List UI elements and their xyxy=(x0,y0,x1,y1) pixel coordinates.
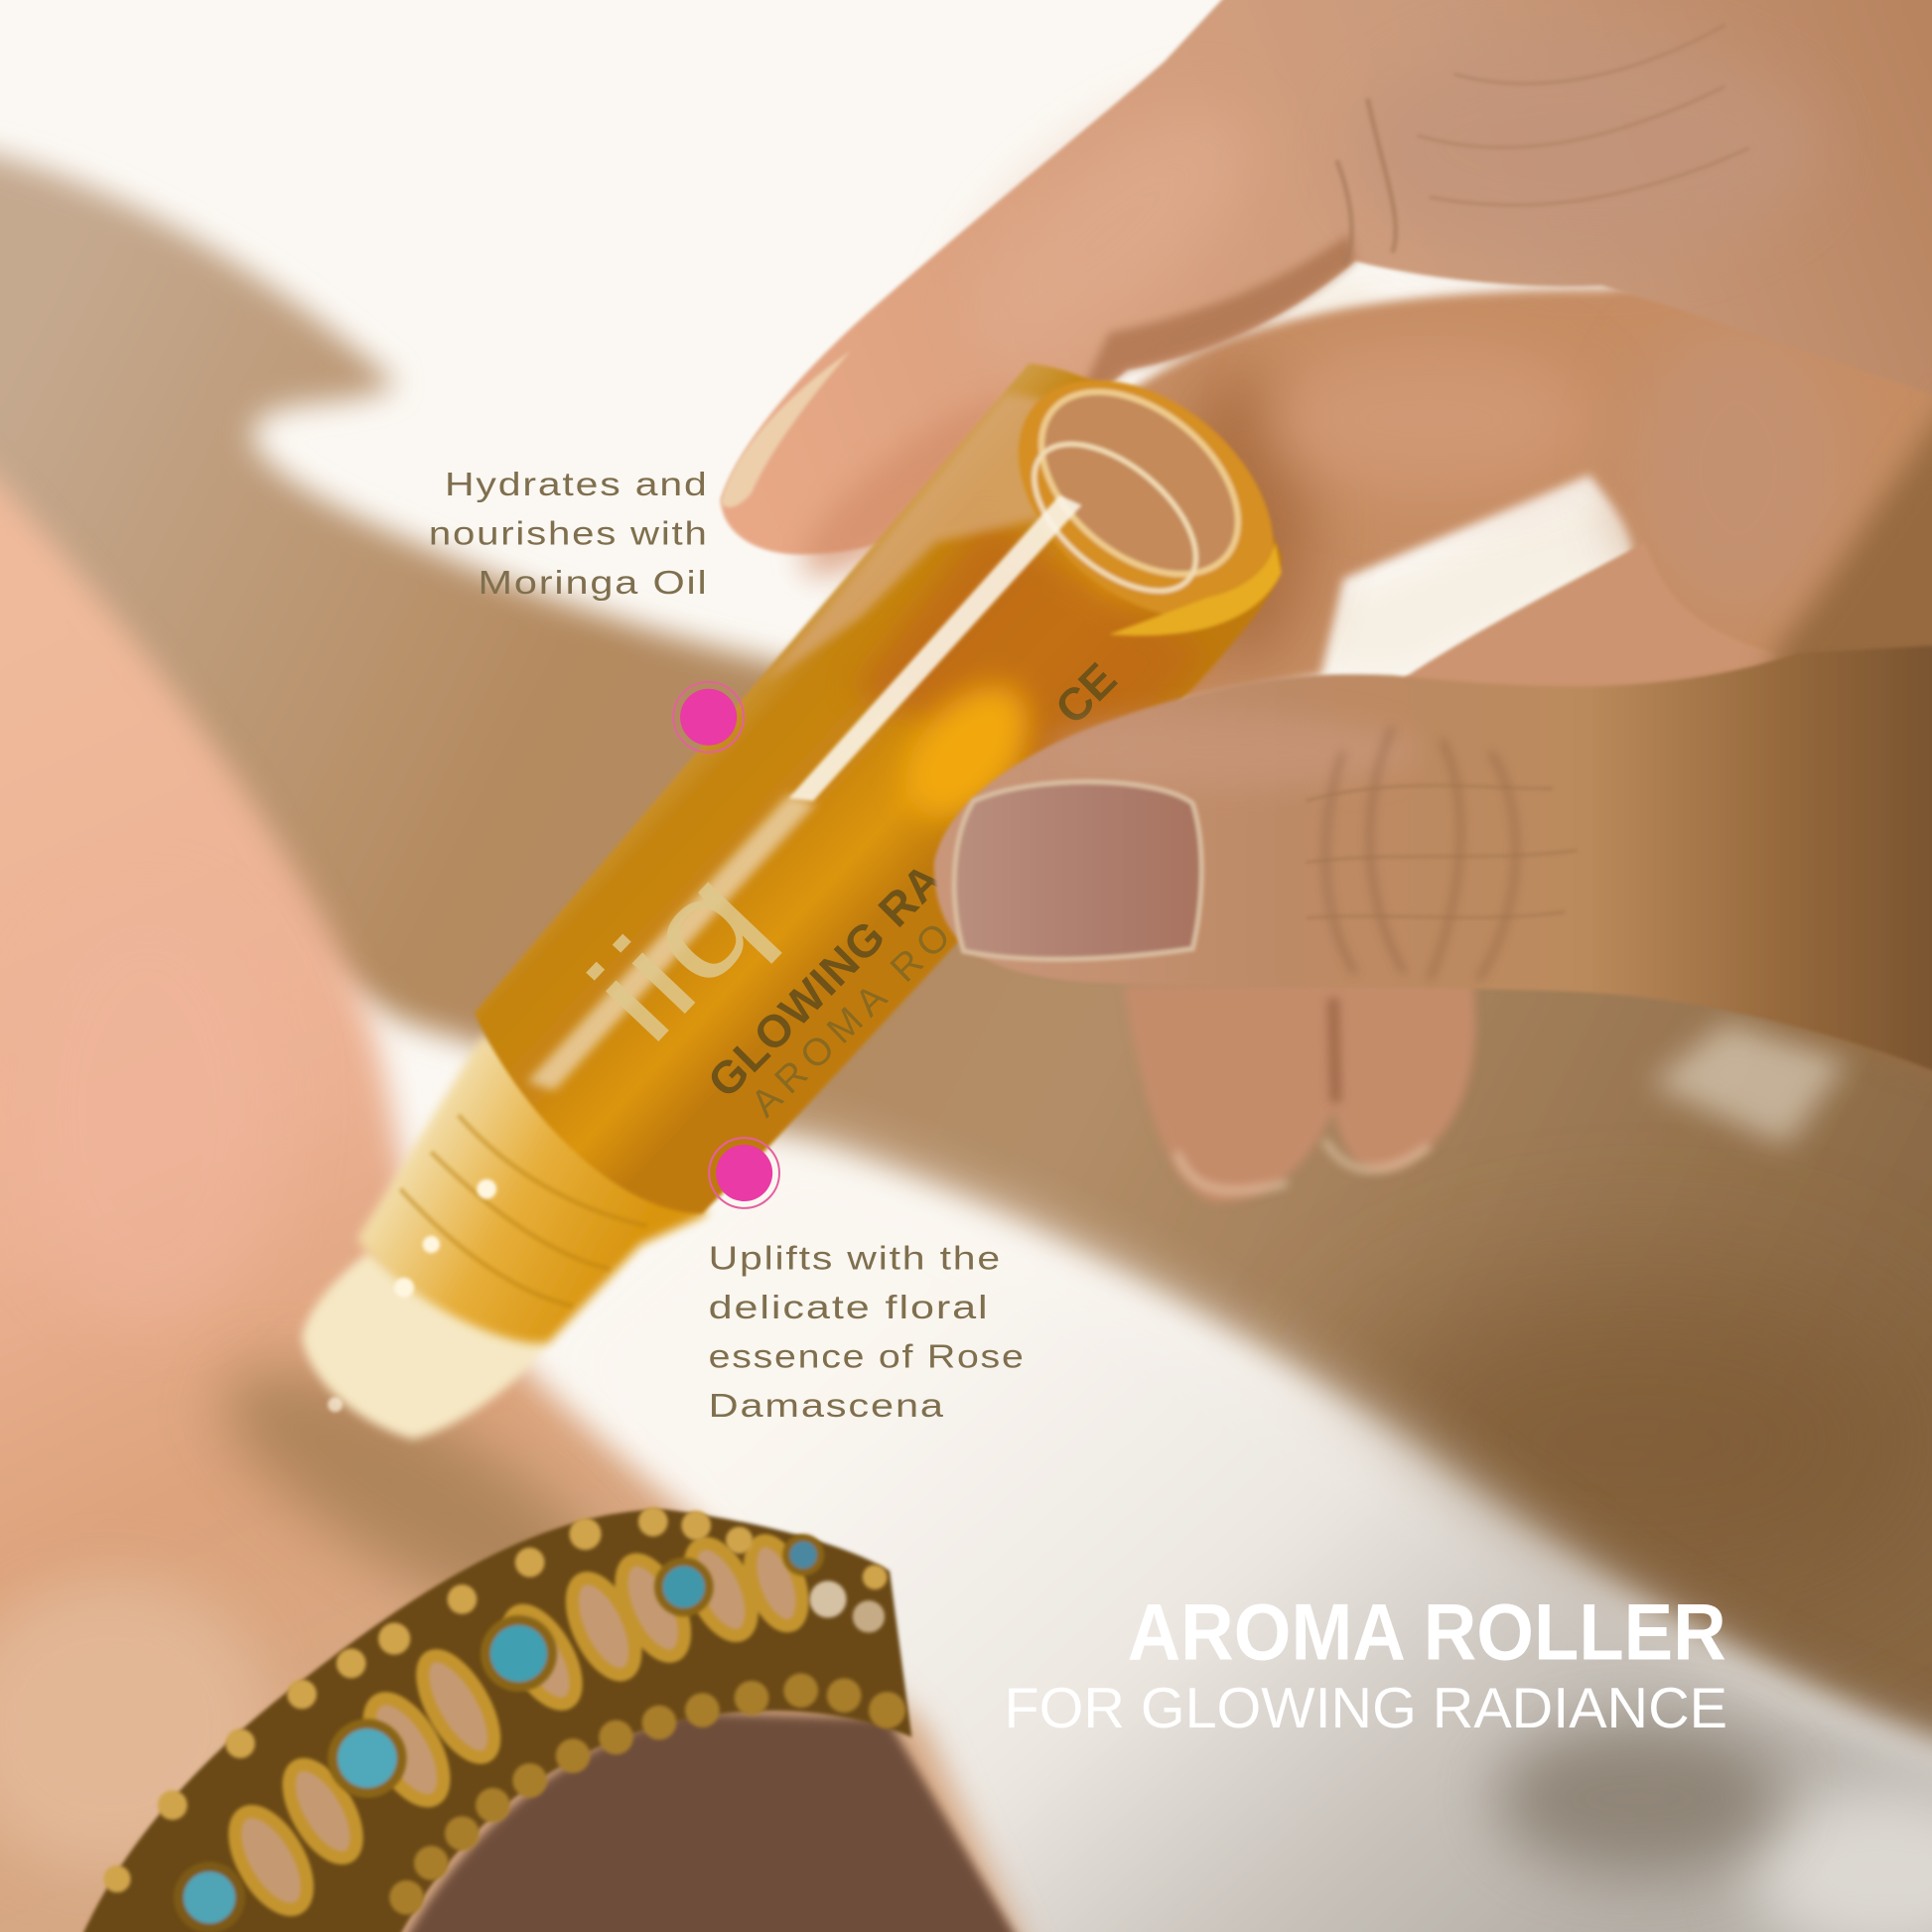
roller ball tip xyxy=(302,1251,548,1440)
bottle logo: iiq xyxy=(561,839,791,1070)
callout text: uplifts: Uplifts with the xyxy=(709,1240,1002,1277)
bracelet with turquoise stones xyxy=(68,1507,911,1932)
hand: lower curled fingers xyxy=(1124,980,1475,1202)
knuckle creases xyxy=(1325,727,1516,980)
title: FOR GLOWING RADIANCE xyxy=(1004,1677,1727,1740)
callout text: uplifts xyxy=(709,1240,1026,1425)
turquoise stones xyxy=(174,1534,824,1932)
callout text: hydrates xyxy=(429,467,709,602)
index fingernail edge xyxy=(721,351,850,507)
title xyxy=(1004,1588,1727,1740)
callout text: uplifts: Damascena xyxy=(709,1388,945,1425)
background: light corner lower right xyxy=(1749,1787,1932,1932)
golden glow in oil xyxy=(883,663,1052,840)
background: pale light patches behind fingers xyxy=(1294,277,1849,1146)
callout text: hydrates: Hydrates and xyxy=(445,467,709,503)
callout text: hydrates: nourishes with xyxy=(429,516,709,553)
forearm in soft focus xyxy=(0,407,1066,1932)
title: AROMA ROLLER xyxy=(1128,1588,1726,1678)
hand: index finger and back of hand xyxy=(721,0,1932,600)
roller bottle: AROMA RO xyxy=(743,914,959,1125)
thumbnail xyxy=(954,781,1201,959)
threaded neck xyxy=(357,1035,709,1343)
roller bottle xyxy=(302,332,1319,1440)
hand: thumb with nail and knuckle creases xyxy=(934,640,1932,1109)
background: dark shadow pool lower right xyxy=(1343,1282,1932,1601)
background: grey smudge lower right xyxy=(1497,1725,1780,1872)
bottle label text: GLOWING RA xyxy=(698,853,952,1107)
highlights on neck xyxy=(328,1179,496,1412)
bottle cap end xyxy=(973,332,1319,666)
callout text: uplifts: essence of Rose xyxy=(709,1339,1026,1376)
callout marker: pink dot upper xyxy=(673,682,744,753)
roller bottle: CE xyxy=(1045,652,1126,734)
background: lower white table surface xyxy=(542,1140,1932,1932)
darker amber oil near the cap xyxy=(850,517,1207,788)
callout text: uplifts: delicate floral xyxy=(709,1290,990,1326)
bottle white highlight stripe xyxy=(527,495,1082,1090)
callout text: hydrates: Moringa Oil xyxy=(479,565,709,602)
hand: fingers behind the bottle xyxy=(1109,246,1932,740)
transparent upper bottle section xyxy=(763,394,1159,684)
hand: shaded palm edge on the right xyxy=(1774,369,1932,1084)
glass body with oil xyxy=(475,363,1282,1213)
callout marker: pink dot lower xyxy=(709,1138,779,1208)
